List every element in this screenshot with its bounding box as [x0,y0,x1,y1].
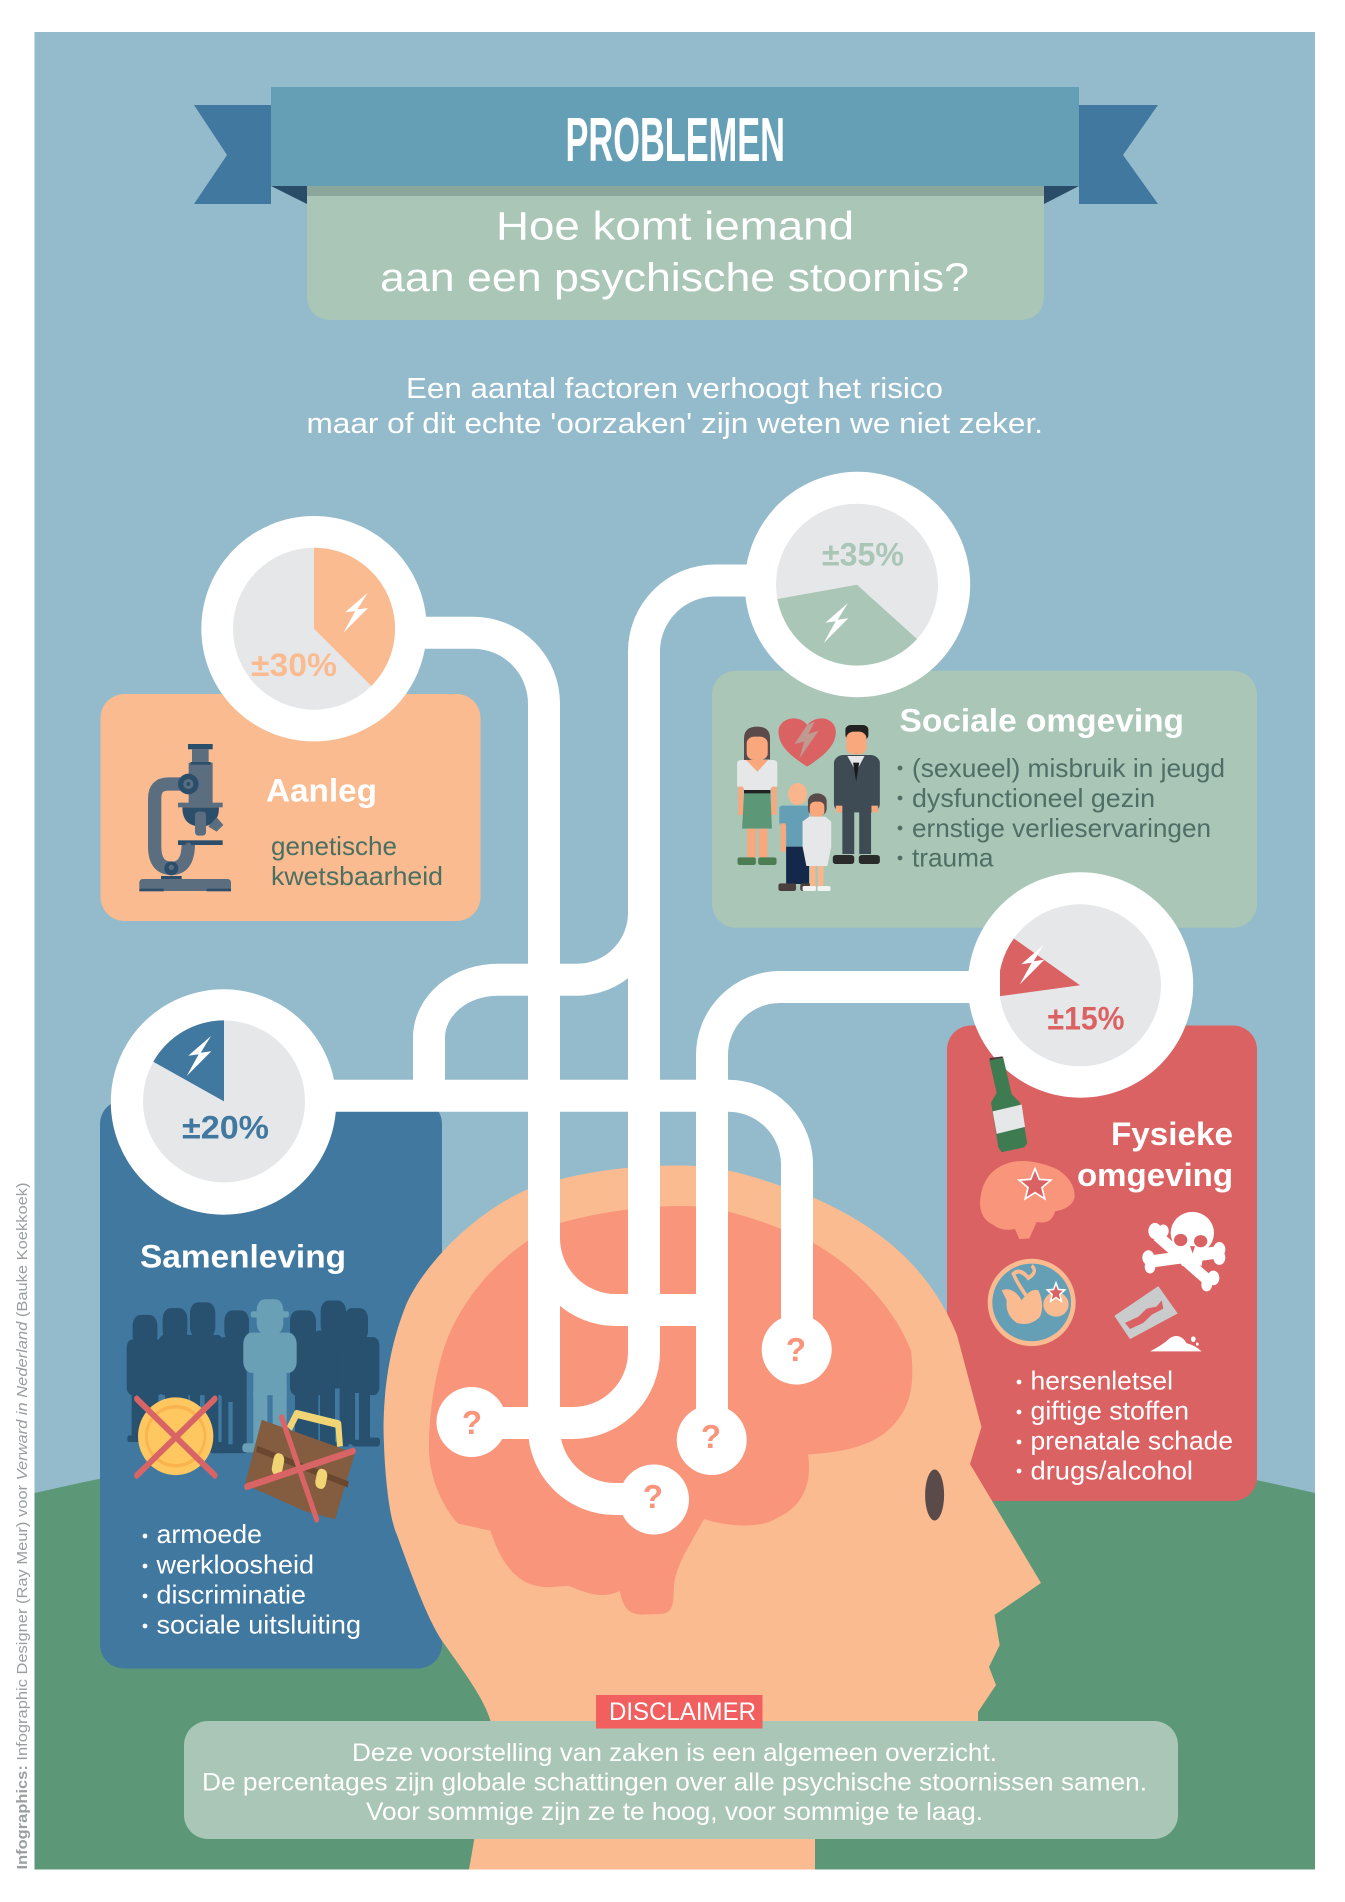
list: fysieke factoren: prenatale schade [1030,1426,1233,1456]
heading: samenleving: Samenleving [140,1238,346,1274]
disclaimer panel: DISCLAIMER [609,1698,756,1726]
ribbon tails [194,105,1158,204]
pie: 20 percent [111,989,336,1215]
list: samenleving factoren [143,1519,361,1640]
pie: 20 percent: ±20% [182,1110,269,1146]
list: fysieke factoren [1017,1366,1233,1486]
list: sociale factoren [898,753,1225,872]
icon: microscope [139,744,231,891]
heading: fysieke omgeving: Fysieke [1111,1116,1233,1152]
icon: crowd silhouettes [127,1299,380,1519]
pie: 15 percent: ±15% [1048,1000,1124,1036]
panel: fysieke omgeving [947,872,1257,1501]
subtitle [380,204,969,300]
list: samenleving factoren: discriminatie [156,1580,306,1610]
pie: 15 percent [968,872,1193,1098]
list: fysieke factoren: giftige stoffen [1030,1396,1189,1426]
icon: skull and crossbones [1142,1212,1225,1291]
icon: powder [1150,1336,1202,1351]
subtitle: Hoe komt iemand [496,204,854,248]
text: genetische kwetsbaarheid: kwetsbaarheid [271,861,443,891]
list: sociale factoren: dysfunctioneel gezin [912,783,1155,813]
icon: razor blade [1114,1286,1178,1339]
heading: aanleg: Aanleg [266,772,377,808]
list: samenleving factoren: sociale uitsluiting [156,1610,361,1640]
subtitle box [307,186,1044,320]
brain [429,1206,912,1615]
pie: 35 percent [745,472,970,697]
text: genetische kwetsbaarheid: genetische [271,831,397,861]
intro text: maar of dit echte 'oorzaken' zijn weten we niet zeker. [306,408,1043,440]
icon: crossed coin [137,1397,215,1476]
icon: crossed briefcase [245,1414,355,1519]
question bubbles: ? [786,1331,806,1368]
disclaimer label [596,1695,762,1728]
list: sociale factoren: (sexueel) misbruik in jeugd [912,753,1225,783]
list: fysieke factoren: drugs/alcohol [1030,1456,1193,1486]
question bubbles: ? [701,1418,721,1455]
intro text [306,373,1043,440]
connecting pipes [320,580,1000,1499]
credit line: Infographics: Infographic Designer (Ray Meur) voor Verward in Nederland (Bauke Koekkoek) [14,1182,31,1870]
disclaimer text: De percentages zijn globale schattingen over alle psychische stoornissen samen. [202,1768,1147,1796]
panel: aanleg [100,516,480,921]
icon: injured brain [980,1161,1075,1239]
disclaimer text [202,1739,1147,1826]
green hill [34,1419,1315,1870]
list: sociale factoren: trauma [912,842,994,872]
intro text: Een aantal factoren verhoogt het risico [406,373,943,405]
text: genetische kwetsbaarheid [271,831,443,891]
pie: 30 percent [201,516,427,741]
panel: samenleving [100,989,442,1668]
question bubbles: ? [462,1404,482,1441]
icon: fetus [988,1259,1076,1346]
subtitle: aan een psychische stoornis? [380,256,969,300]
title: PROBLEMEN [566,106,785,175]
head with brain [384,1165,1041,1870]
pie: 35 percent: ±35% [822,536,904,572]
disclaimer text: Deze voorstelling van zaken is een algemeen overzicht. [352,1739,997,1767]
question bubbles: ? [643,1478,663,1515]
question bubbles [436,1315,832,1534]
disclaimer text: Voor sommige zijn ze te hoog, voor sommige te laag. [366,1798,983,1826]
list: fysieke factoren: hersenletsel [1030,1366,1173,1396]
heading: sociale omgeving: Sociale omgeving [900,702,1184,738]
panel: sociale omgeving [712,472,1257,928]
icon: bottle [989,1056,1027,1152]
ribbon main [271,87,1079,186]
list: samenleving factoren: armoede [156,1519,262,1549]
heading: fysieke omgeving: omgeving [1077,1157,1233,1193]
disclaimer panel [184,1695,1178,1839]
pie: 30 percent: ±30% [251,647,337,683]
eye [925,1470,944,1520]
list: samenleving factoren: werkloosheid [155,1550,314,1580]
heading: fysieke omgeving [1077,1116,1233,1193]
icon: family with broken heart [737,718,880,891]
banner [194,87,1158,320]
list: sociale factoren: ernstige verlieservaringen [912,813,1211,843]
icons: physical hazards [980,1056,1225,1351]
